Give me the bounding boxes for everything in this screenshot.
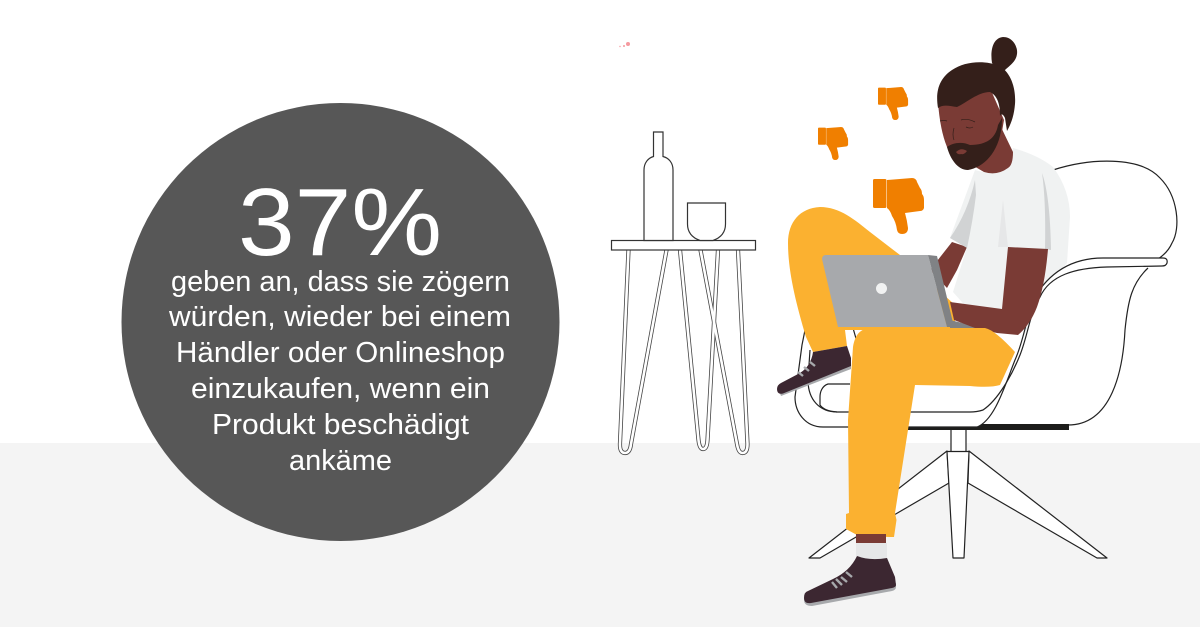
- small thumb: [818, 127, 848, 160]
- body text: Händler oder Onlineshop: [176, 337, 505, 369]
- sock: [856, 543, 887, 560]
- laptop lid: [822, 255, 947, 327]
- large thumb: [873, 178, 924, 234]
- standing leg: [846, 328, 1015, 537]
- table legs: [620, 250, 748, 453]
- shoe upper: [804, 556, 896, 603]
- far arm: [930, 242, 967, 288]
- body text: [168, 266, 511, 477]
- mouth: [956, 149, 967, 154]
- ankle: [856, 534, 886, 545]
- medium thumb: [878, 87, 908, 120]
- beard: [947, 118, 1002, 170]
- face: [938, 88, 1004, 165]
- bowl: [688, 203, 726, 240]
- hair bun: [991, 37, 1017, 71]
- eyes, brow and nose: [940, 119, 975, 140]
- side table with bottle and bowl: [612, 132, 756, 453]
- hair: [937, 62, 1015, 131]
- pink specks: [619, 42, 630, 47]
- body text: ankäme: [289, 445, 392, 477]
- laptop edge: [928, 255, 954, 327]
- near arm: [950, 247, 1048, 335]
- shoe sole: [804, 583, 896, 606]
- body text: würden, wieder bei einem: [168, 301, 511, 333]
- body text: einzukaufen, wenn ein: [191, 373, 490, 405]
- chair base: [809, 429, 1107, 558]
- shirt fold: [1042, 173, 1051, 250]
- chair shell lines: [795, 258, 1167, 427]
- statistic circle: [122, 103, 560, 541]
- body text: geben an, dass sie zögern: [171, 266, 510, 298]
- table top: [612, 240, 756, 250]
- bottle: [644, 132, 673, 240]
- crossed leg: [788, 207, 955, 352]
- lower foot: [804, 534, 896, 606]
- lounge chair: [809, 161, 1177, 558]
- laces: [832, 572, 852, 588]
- chair shell front fill: [795, 258, 1165, 427]
- black seat shadow bar: [906, 424, 1069, 430]
- headline: 37%: 37%: [238, 169, 442, 276]
- body text: Produkt beschädigt: [212, 409, 469, 441]
- sleeve shading: [950, 180, 976, 248]
- neck: [972, 125, 1013, 173]
- chair back fill: [983, 161, 1177, 425]
- floor band: [0, 443, 1200, 627]
- laptop: [822, 255, 983, 328]
- thumbs-down icons: [818, 87, 924, 234]
- chair back outline: [1053, 161, 1177, 425]
- upper shoe: [777, 346, 851, 396]
- man torso, arm and head: [930, 37, 1070, 345]
- t-shirt: [950, 148, 1070, 345]
- laptop logo: [876, 283, 887, 294]
